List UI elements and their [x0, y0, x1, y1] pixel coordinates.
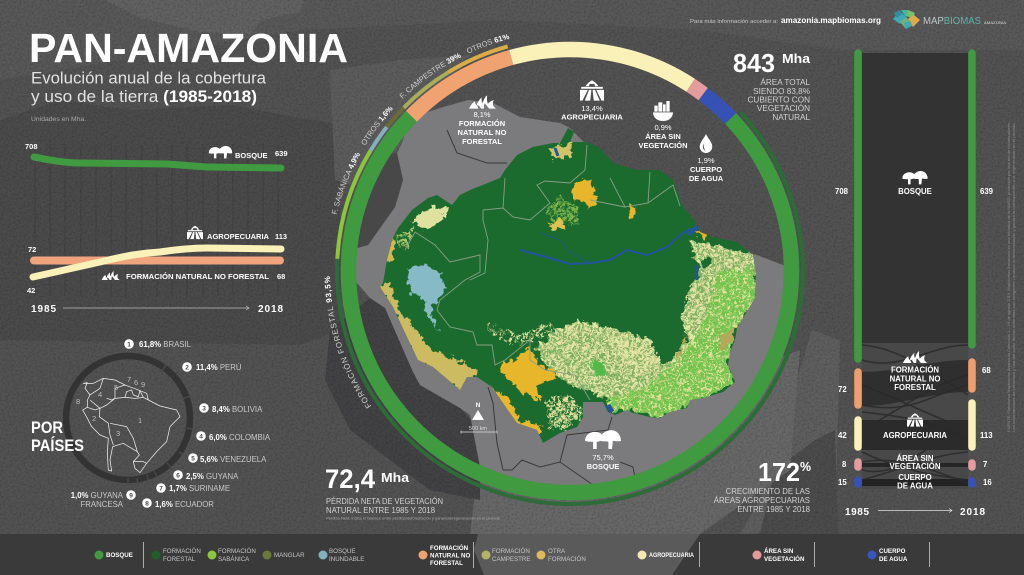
stat: 843 Mha: VEGETACIÓN — [757, 103, 810, 113]
political borders on land — [447, 130, 635, 485]
stat: 72,4 Mha: NATURAL ENTRE 1985 Y 2018 — [326, 506, 435, 515]
legend: ÁREA SIN — [764, 548, 794, 555]
map region: northern savanna — [571, 180, 596, 202]
label: agropecuaria: 13,4% — [581, 104, 603, 113]
line chart: evolution 1985-2018: 72 — [28, 245, 36, 254]
legend: BOSQUE — [329, 548, 355, 555]
legend: CUERPO — [879, 548, 906, 555]
sankey chart: AGROPECUARIA — [883, 431, 947, 440]
north arrow and scale: N — [476, 402, 481, 409]
country labels: 3 — [202, 406, 206, 412]
stat: 72,4 Mha: Mha — [381, 470, 410, 485]
map region: central deforestation arc — [534, 318, 692, 398]
sankey chart: 15 — [838, 478, 847, 487]
panel: por paises: 8 — [76, 397, 80, 406]
stat: 72,4 Mha: Pérdida Neta: indica el balance entre pérdida/deforestación y ganancia/regeneración en el período. — [326, 516, 501, 520]
map region: Bolivia gold — [500, 346, 558, 402]
ring labels: F. CAMPESTRE 39% — [399, 53, 461, 99]
panel: por paises: PAÍSES — [31, 436, 84, 455]
legend: FORESTAL — [430, 560, 463, 567]
sankey chart: ÁREA SIN — [897, 454, 934, 463]
header link: amazonia.mapbiomas.org — [781, 15, 881, 25]
country labels: 8,4% BOLIVIA — [212, 405, 263, 414]
label: cuerpo de agua: DE AGUA — [689, 174, 724, 183]
legend: BOSQUE — [106, 552, 133, 559]
label: bosque — [585, 430, 621, 471]
ring labels: FORMACIÓN FORESTAL 93,5% — [324, 276, 372, 409]
country labels: 7 — [159, 486, 163, 492]
stat: 172%: ENTRE 1985 Y 2018 — [737, 505, 810, 514]
ring labels: OTROS 61% — [466, 34, 510, 53]
ring labels: F. SABÁNICA 4,9% — [332, 152, 360, 214]
legend: NATURAL NO — [430, 552, 471, 560]
sankey chart: FORMACIÓN — [891, 366, 939, 374]
label: area sin vegetacion: VEGETACIÓN — [638, 141, 688, 150]
sankey chart: 708 — [835, 187, 849, 196]
label: agropecuaria: AGROPECUARIA — [561, 112, 623, 122]
label: bosque: BOSQUE — [587, 462, 619, 471]
stat: 72,4 Mha: PÉRDIDA NETA DE VEGETACIÓN — [326, 497, 443, 506]
stat: 172%: 172 — [758, 459, 800, 487]
line chart: evolution 1985-2018: 68 — [277, 272, 285, 281]
label: formacion natural no forestal: FORMACIÓN — [459, 119, 505, 128]
map region: northern Andes — [412, 207, 447, 230]
logo: MapBiomas: MAPBIOMAS — [923, 16, 981, 27]
panel: por paises: 2 — [92, 414, 96, 423]
legend: DE AGUA — [879, 556, 908, 563]
legend: FORESTAL — [163, 556, 196, 563]
country labels: 5,6% VENEZUELA — [200, 455, 267, 464]
source note: FUENTE: Plataforma Mapbiomas Amazonía Colección 1 – 14 de agosto 2019. Mapbiomas Amazonía es una iniciativa de la RAISG, producida por una red de colaboradores. — [1007, 122, 1011, 432]
sankey chart: VEGETACIÓN — [890, 462, 941, 471]
title — [29, 25, 348, 123]
north arrow and scale — [461, 402, 497, 434]
sankey chart: 2018 — [960, 507, 985, 518]
legend: FORMACIÓN — [218, 548, 256, 555]
legend: AGROPECUARIA — [649, 552, 694, 559]
sankey chart: BOSQUE — [898, 187, 932, 196]
stat: 843 Mha — [733, 50, 811, 122]
country labels — [71, 339, 271, 509]
sankey chart: 1985 — [845, 507, 869, 518]
label: formacion natural no forestal — [458, 95, 507, 146]
sankey chart: 7 — [983, 460, 987, 469]
country labels: 5 — [191, 456, 195, 462]
country labels: 4 — [199, 434, 203, 440]
sankey chart — [835, 53, 994, 518]
sankey chart: DE AGUA — [897, 482, 933, 490]
line chart: evolution 1985-2018: AGROPECUARIA — [207, 232, 270, 241]
icon: agriculture — [187, 226, 203, 240]
panel: por paises: 9 — [141, 380, 145, 389]
map region: Andes grassland — [378, 283, 478, 392]
sankey chart: 8 — [842, 460, 847, 469]
label: formacion natural no forestal: 8,1% — [473, 110, 491, 119]
legend: SABÁNICA — [218, 556, 250, 563]
ring labels — [324, 34, 510, 409]
panel: por paises: 1 — [138, 416, 142, 425]
South America outline — [83, 378, 180, 473]
icon: sankey grassland — [903, 351, 927, 363]
sankey chart: FORESTAL — [894, 383, 936, 392]
panel: por paises: 5 — [114, 383, 118, 392]
country labels: 1,7% SURINAME — [169, 484, 230, 493]
stat: 843 Mha: 843 — [733, 50, 775, 78]
icon: grassland — [102, 271, 120, 280]
sankey chart: 72 — [838, 385, 847, 394]
legend: FORMACIÓN — [548, 556, 586, 563]
country ring — [66, 356, 196, 486]
country labels: 9 — [129, 492, 133, 500]
panel: por paises: 3 — [116, 429, 120, 438]
legend: FORMACIÓN — [492, 548, 530, 555]
stat: 172%: % — [800, 459, 811, 474]
map region: flooded forest — [407, 264, 446, 332]
sankey chart: 68 — [982, 366, 991, 375]
legend: MANGLAR — [274, 552, 305, 559]
country labels: 2 — [185, 364, 189, 372]
panel: por paises: 6 — [134, 378, 138, 387]
legend: FORMACIÓN — [163, 548, 201, 555]
header link — [690, 15, 881, 25]
sankey chart: NATURAL NO — [890, 374, 940, 384]
line chart: evolution 1985-2018: 2018 — [258, 304, 283, 315]
stat: 172%: ÁREAS AGROPECUARIAS — [714, 496, 810, 505]
icon: forest — [208, 146, 232, 158]
map rivers — [520, 148, 700, 412]
title: Unidades en Mha. — [31, 116, 86, 123]
label: area sin vegetacion: ÁREA SIN — [645, 132, 681, 141]
map: Amazon land cover — [380, 128, 756, 443]
ring: outer sub-classes — [241, 0, 899, 575]
label: bosque: 75,7% — [592, 453, 614, 462]
stat: 843 Mha: Mha — [782, 51, 811, 66]
line chart: evolution 1985-2018 — [25, 142, 288, 315]
title: PAN-AMAZONIA — [29, 25, 348, 71]
map internal borders — [405, 145, 680, 400]
label: formacion natural no forestal: NATURAL NO — [458, 128, 507, 137]
map region: Bolivia clearings — [545, 395, 585, 430]
ring labels: OTROS 1,6% — [362, 106, 392, 145]
label: cuerpo de agua — [689, 134, 724, 183]
stat: 843 Mha: SIENDO 83,8% — [753, 87, 810, 96]
north arrow and scale: 500 km — [469, 426, 487, 432]
country labels: 2,5% GUYANA — [186, 472, 239, 481]
label: area sin vegetacion — [638, 101, 688, 150]
label: agropecuaria — [561, 80, 623, 122]
stat: 843 Mha: CUBIERTO CON — [748, 96, 810, 104]
panel: por paises: POR — [31, 418, 63, 437]
line chart: evolution 1985-2018: BOSQUE — [235, 151, 268, 160]
source note — [1007, 122, 1016, 432]
sankey flows — [862, 53, 968, 489]
land base inside ring — [356, 100, 784, 485]
country labels: FRANCESA — [81, 500, 124, 509]
legend — [0, 534, 1024, 575]
stat: 72,4 Mha — [325, 464, 501, 520]
label: formacion natural no forestal: FORESTAL — [462, 137, 502, 146]
sankey chart: 16 — [983, 478, 992, 487]
stat: 843 Mha: NATURAL — [772, 113, 810, 122]
line chart: evolution 1985-2018: FORMACIÓN NATURAL NO FORESTAL — [126, 272, 269, 281]
legend: CAMPESTRE — [492, 556, 531, 563]
country labels: 61,8% BRASIL — [139, 340, 192, 349]
map region: northeast mosaic — [680, 240, 757, 345]
legend: OTRA — [548, 548, 566, 555]
sankey chart: 639 — [980, 187, 994, 196]
line chart: evolution 1985-2018: 708 — [25, 142, 38, 151]
sankey chart: CUERPO — [898, 473, 932, 482]
country labels: 1 — [127, 342, 131, 348]
map region: cerrado green — [606, 270, 756, 418]
country labels: 11,4% PERÚ — [196, 363, 242, 372]
panel: por paises: 7 — [127, 375, 131, 384]
country labels: 6,0% COLOMBIA — [209, 433, 271, 442]
sankey chart: 113 — [980, 431, 993, 440]
sankey chart: 42 — [838, 431, 847, 440]
icon: sankey forest — [902, 171, 928, 184]
source note: Las informaciones de cobertura y uso del suelo fueron obtenidas con imágenes Landsat; la deforestación y ganancia corresponden a la regeneración en el período. — [1012, 122, 1016, 432]
country labels: 6 — [176, 472, 180, 480]
title: Evolución anual de la cobertura — [31, 70, 267, 88]
label: cuerpo de agua: 1,9% — [697, 156, 715, 165]
label: cuerpo de agua: CUERPO — [690, 165, 722, 174]
line chart: evolution 1985-2018: 639 — [275, 149, 288, 158]
logo: MapBiomas: AMAZONIA — [984, 21, 1007, 25]
line chart: evolution 1985-2018: 1985 — [31, 304, 56, 315]
stat: 72,4 Mha: 72,4 — [325, 464, 375, 494]
legend: FORMACIÓN — [430, 544, 469, 552]
country labels: 1,6% ECUADOR — [155, 500, 214, 509]
country labels: 8 — [145, 500, 149, 508]
country labels: 1,0% GUYANA — [71, 491, 124, 500]
legend: INUNDABLE — [329, 556, 364, 563]
line chart: evolution 1985-2018: 113 — [275, 232, 287, 241]
title: y uso de la tierra (1985-2018) — [31, 88, 257, 106]
sankey bars — [858, 53, 972, 484]
header link: Para más información acceder a: — [690, 19, 778, 25]
stat: 172%: CRECIMIENTO DE LAS — [726, 487, 810, 496]
icon: sankey agriculture — [907, 413, 923, 427]
ring: main classes — [257, 0, 883, 575]
logo: MapBiomas — [893, 10, 1007, 29]
line chart: evolution 1985-2018: 42 — [27, 286, 35, 295]
legend: VEGETACIÓN — [764, 555, 805, 563]
stat: 843 Mha: ÁREA TOTAL — [760, 77, 810, 87]
label: area sin vegetacion: 0,9% — [654, 123, 672, 132]
panel: por paises — [31, 339, 271, 509]
stat: 172% — [714, 459, 811, 514]
panel: por paises: 4 — [98, 390, 102, 399]
